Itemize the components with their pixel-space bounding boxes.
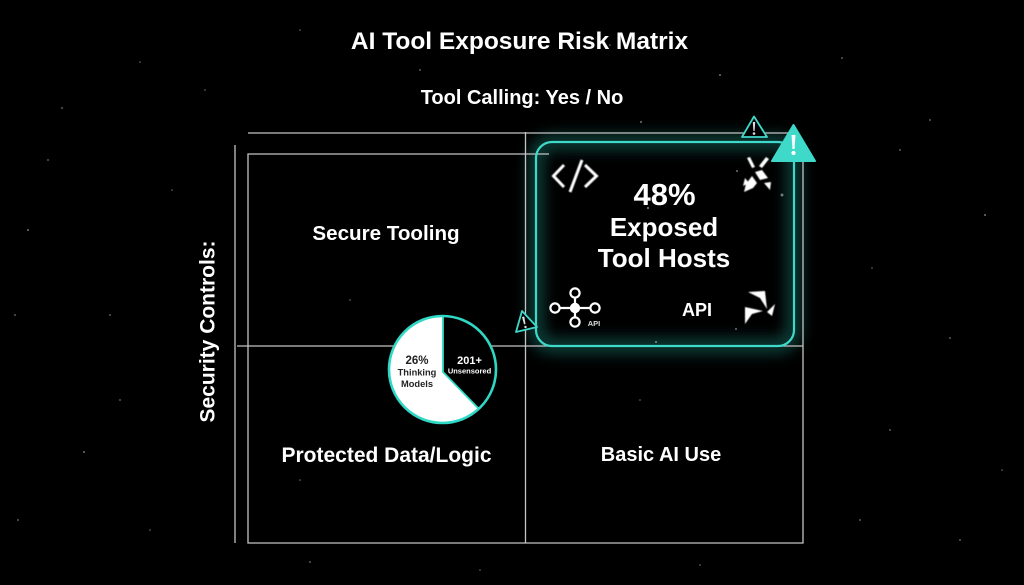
title: AI Tool Exposure Risk Matrix <box>351 28 688 55</box>
pie label: unsensored: Unsensored <box>448 366 492 376</box>
icon: shattered arrows top right <box>743 157 771 192</box>
panel: exposed tool hosts <box>536 142 794 346</box>
pie label: thinking models: Thinking <box>398 368 437 378</box>
icon: pinwheel arrows <box>745 291 775 324</box>
matrix grid lines <box>235 132 803 543</box>
icon: large warning triangle <box>772 125 815 161</box>
stat label: exposed tool hosts: Exposed <box>610 212 718 242</box>
quadrant label: basic AI use: Basic AI Use <box>601 444 721 466</box>
y-axis heading: Security Controls: <box>196 240 220 423</box>
x-axis heading: Tool Calling: Yes / No <box>421 87 623 109</box>
icon: small warning triangle left <box>516 311 537 332</box>
quadrant label: protected data: Protected Data/Logic <box>281 444 492 467</box>
pie label: thinking models: Models <box>401 379 433 389</box>
stat label: exposed tool hosts: Tool Hosts <box>598 243 730 273</box>
icon: small warning triangle top <box>742 116 767 137</box>
icon: network node with API label <box>550 288 600 328</box>
quadrant label: secure tooling: Secure Tooling <box>312 222 460 245</box>
stat: 48 percent: 48% <box>633 177 696 212</box>
pie label: unsensored: 201+ <box>457 355 482 367</box>
panel: teal glow behind highlighted quadrant <box>536 142 794 346</box>
icon: code brackets <box>554 160 596 192</box>
label: API: API <box>682 300 712 320</box>
pie label: thinking models: 26% <box>405 355 429 367</box>
pie chart <box>389 316 496 423</box>
icon: network node with API label: API <box>588 319 600 328</box>
